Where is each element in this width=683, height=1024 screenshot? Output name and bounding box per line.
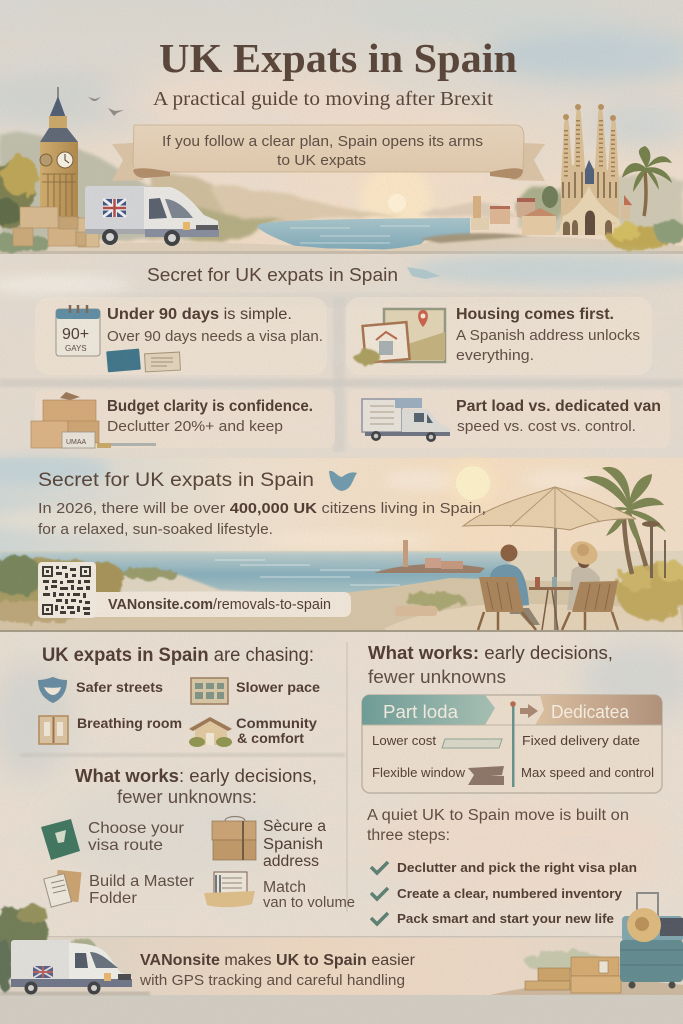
flag on van [33, 966, 53, 978]
sun [449, 459, 497, 507]
bench stone [395, 606, 437, 616]
section background [0, 254, 683, 457]
panel: header scene [0, 0, 683, 255]
right column: heading: fewer unknowns [368, 667, 506, 687]
heading: fewer unknowns: [117, 787, 257, 807]
flag on van [103, 199, 126, 217]
table rows: Lower cost [372, 734, 437, 748]
card: housing [346, 297, 652, 375]
tree left [0, 156, 50, 252]
heading: UK expats in Spain are chasing: [42, 645, 314, 666]
heading: secret for UK expats: Secret for UK expats in Spain [38, 470, 314, 491]
birds [88, 97, 124, 116]
banner text: If you follow a clear plan, Spain opens its arms [162, 133, 483, 150]
header sky [0, 0, 683, 255]
text [107, 398, 313, 435]
URL pill [80, 592, 351, 617]
item: community and comfort: & comfort [237, 730, 304, 746]
left chair [478, 577, 536, 630]
item: master folder: Folder [89, 890, 138, 907]
icon: small plane [407, 267, 440, 279]
item: Spanish address: Spanish [263, 836, 323, 853]
footer text: VANonsite makes UK to Spain easier [140, 952, 415, 969]
section background [0, 632, 683, 938]
bushes right [405, 562, 683, 620]
stat text: In 2026, there will be over 400,000 UK citizens living in Spain, [38, 500, 486, 517]
title: UK Expats in Spain [159, 35, 517, 81]
scene clouds [0, 456, 600, 548]
item: breathing room: Breathing room [77, 715, 182, 731]
icon: boxes [525, 951, 621, 993]
text [456, 306, 640, 364]
QR code [38, 562, 96, 618]
footer background [0, 936, 683, 1024]
right chair [562, 581, 618, 630]
panel: lifestyle scene [0, 456, 683, 632]
item: Spanish address [212, 816, 326, 870]
icon: calendar [56, 305, 100, 356]
icon: palm [583, 467, 666, 578]
banner ribbon [112, 125, 545, 181]
icon: couple at table [478, 537, 618, 630]
text: Housing comes first. [456, 306, 614, 323]
text: everything. [456, 347, 534, 364]
icon: van [11, 940, 132, 994]
footer text: with GPS tracking and careful handling [139, 972, 405, 989]
item: visa route: visa route [88, 837, 163, 854]
item: Spanish address: address [263, 853, 319, 870]
item: match van to volume: van to volume [263, 895, 355, 911]
stat text: for a relaxed, sun-soaked lifestyle. [38, 521, 273, 538]
text: Part load vs. dedicated van [456, 398, 661, 415]
icon: stacked boxes: UMAA [66, 439, 87, 446]
right column: heading [368, 643, 613, 687]
step 3: Pack smart and start your new life [397, 911, 614, 926]
item: visa route: Choose your [88, 820, 185, 837]
item: visa route [41, 819, 185, 860]
right column: heading: What works: early decisions, [368, 643, 613, 663]
table rows: Flexible window [372, 766, 466, 780]
sea [0, 552, 515, 597]
item: slower pace [191, 678, 320, 704]
item: Spanish address: Sècure a [263, 818, 326, 835]
table headers: Part loda [383, 702, 459, 722]
panel: bottom columns [0, 632, 683, 938]
foreground ground [0, 578, 683, 632]
item: match van to volume: Match [263, 879, 306, 896]
icon: Big Ben tower [40, 87, 78, 217]
table rows [372, 734, 654, 780]
step 1: Declutter and pick the right visa plan [397, 860, 637, 875]
item: master folder: Build a Master [89, 873, 195, 890]
URL pill: VANonsite.com/removals-to-spain [108, 597, 331, 613]
stat text [38, 500, 486, 538]
icon: coastal village [471, 186, 566, 235]
icon: calendar: 90+ [62, 326, 89, 343]
table rows: Max speed and control [521, 766, 654, 780]
table icons [442, 739, 502, 748]
man [490, 544, 540, 625]
icon: map and house [355, 309, 445, 366]
three steps: three steps: [367, 827, 450, 844]
three steps: A quiet UK to Spain move is built on [367, 807, 629, 824]
item: community and comfort [189, 715, 317, 747]
table headers: Dedicatea [551, 702, 630, 722]
icon: calendar: GAYS [65, 344, 87, 353]
left column: what works [41, 766, 355, 911]
icon: umbrella [463, 487, 636, 630]
icon: lorry [362, 398, 450, 442]
item: master folder [44, 870, 195, 907]
heading [75, 766, 317, 807]
panel: secrets cards [0, 254, 683, 457]
left column: chasing [38, 645, 320, 747]
subtitle: A practical guide to moving after Brexit [153, 89, 494, 110]
shrub left [0, 905, 96, 991]
card: budget [31, 390, 335, 448]
icon: bird [329, 471, 357, 491]
text [456, 398, 661, 435]
icon: cardboard boxes [13, 207, 99, 247]
footer text [139, 952, 415, 989]
table rows: Fixed delivery date [522, 734, 640, 748]
icon: palm tree [622, 146, 672, 216]
icon: removal van [85, 186, 219, 246]
heading: What works: early decisions, [75, 766, 317, 786]
comparison table [362, 695, 662, 793]
text: Budget clarity is confidence. [107, 398, 313, 415]
icon: Sagrada Familia [558, 104, 632, 235]
lighthouse and headland [374, 540, 485, 573]
shore [0, 236, 683, 255]
icon: stacked boxes [31, 392, 156, 448]
card: under 90 days [35, 297, 327, 375]
table headers [383, 702, 630, 722]
shrubs right [608, 220, 683, 250]
item: community and comfort: Community [236, 715, 317, 731]
text: Under 90 days is simple. [107, 306, 292, 323]
text [107, 306, 323, 345]
item: match van to volume [204, 872, 355, 911]
item: safer streets: Safer streets [76, 679, 163, 695]
card: part load [348, 390, 670, 448]
panel: footer band [0, 893, 683, 1024]
woman [567, 537, 601, 610]
sea [257, 218, 470, 250]
scene sky [0, 458, 683, 632]
icon: suitcase and hat [620, 893, 683, 988]
text: A Spanish address unlocks [456, 327, 640, 344]
three steps [367, 807, 637, 926]
table [529, 577, 573, 630]
item: breathing room [39, 715, 182, 744]
distant horizon [0, 551, 683, 591]
item: slower pace: Slower pace [236, 679, 320, 695]
item: safer streets [38, 677, 163, 703]
step 2: Create a clear, numbered inventory [397, 886, 623, 901]
sun [360, 164, 432, 236]
text: Declutter 20%+ and keep [107, 418, 283, 435]
distant hills [0, 133, 683, 244]
heading: secret for UK expats: Secret for UK expats in Spain [147, 265, 398, 285]
banner text: to UK expats [277, 152, 366, 169]
bushes left [0, 555, 178, 623]
text: speed vs. cost vs. control. [457, 418, 636, 435]
banner text [162, 133, 483, 169]
text: Over 90 days needs a visa plan. [107, 328, 323, 345]
icon: passport and card [106, 349, 180, 372]
